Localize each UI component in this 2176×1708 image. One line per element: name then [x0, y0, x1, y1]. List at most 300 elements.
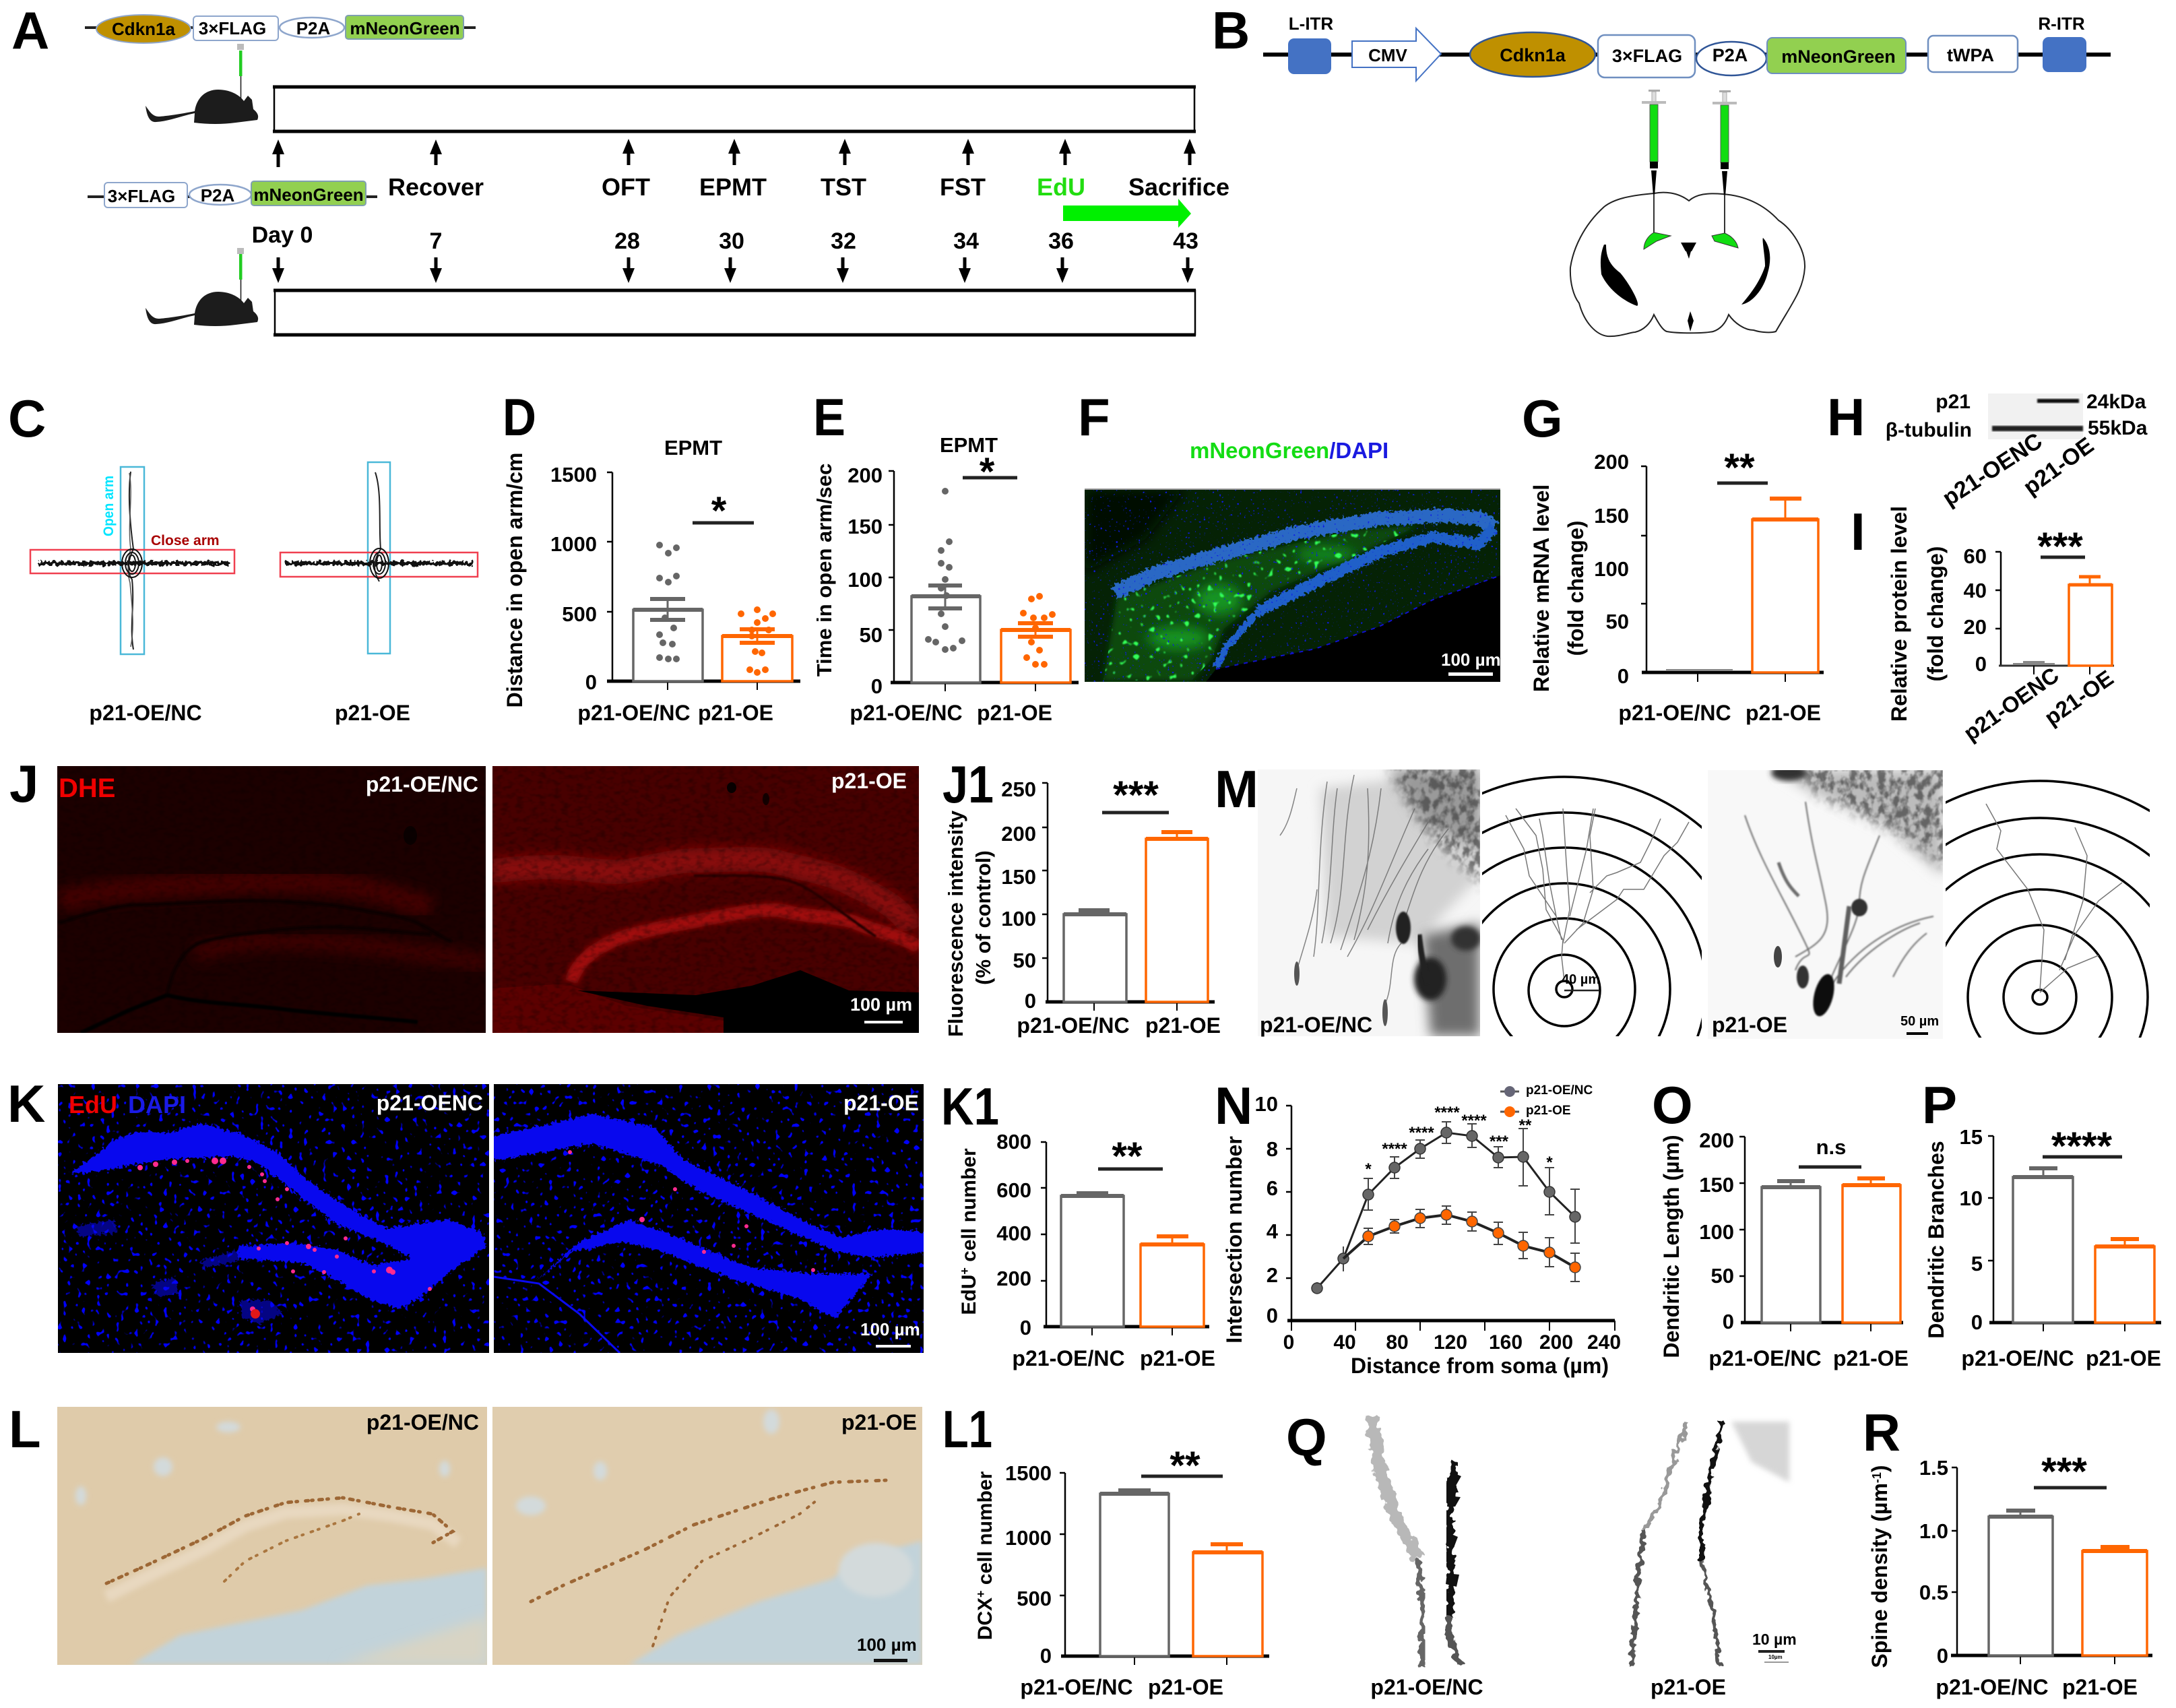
J1 group labels: p21-OE/NC — [1017, 1013, 1130, 1038]
construct map: R-ITR — [2038, 13, 2085, 34]
R group labels: p21-OE/NC — [1935, 1675, 2049, 1699]
N significance stars: ** — [1519, 1116, 1532, 1135]
construct map: mNeonGreen — [1781, 46, 1896, 67]
R y-axis title: ) — [1867, 1465, 1892, 1472]
label B: B — [1212, 1, 1250, 60]
D axes and ticks: 1500 — [550, 463, 597, 486]
E axes and ticks: 150 — [847, 515, 883, 538]
O axes and ticks: 200 — [1699, 1129, 1734, 1152]
panel L1: DCX cell number chart — [942, 1399, 1269, 1699]
E dots — [925, 488, 1056, 668]
label K1: K1 — [941, 1077, 999, 1136]
Q dendrites — [1371, 1416, 1789, 1666]
G axes and ticks: 150 — [1594, 504, 1629, 528]
blot lane labels: p21-OE — [2018, 433, 2099, 500]
panel O: dendritic length chart — [1652, 1075, 1909, 1370]
K1 axes and ticks: 200 — [996, 1267, 1031, 1290]
N significance stars: **** — [1382, 1140, 1407, 1158]
label Q: Q — [1286, 1407, 1327, 1467]
L1 axes and ticks: 0 — [1040, 1644, 1052, 1668]
J image control — [57, 766, 486, 1033]
O bars — [1762, 1178, 1900, 1323]
M Sholl tracing p21-OE — [1946, 780, 2150, 1038]
R significance — [2034, 1450, 2107, 1494]
label H: H — [1827, 387, 1865, 447]
panel J1: fluorescence intensity chart — [942, 755, 1221, 1038]
I y-axis title: (fold change) — [1923, 546, 1948, 681]
O group labels — [1708, 1346, 1909, 1370]
E axes and ticks: 100 — [847, 568, 883, 592]
R axes and ticks: 1.0 — [1919, 1519, 1948, 1543]
P group labels: p21-OE/NC — [1961, 1346, 2074, 1370]
I axes and ticks — [1964, 544, 2114, 676]
Q scale bar: 10 µm — [1752, 1631, 1797, 1648]
G y-axis title — [1529, 484, 1588, 692]
label R: R — [1863, 1403, 1900, 1462]
K labels: p21-OENC — [377, 1091, 483, 1115]
top construct: Cdkn1a 3xFLAG P2A mNeonGreen — [85, 15, 476, 43]
N legend: p21-OE/NC — [1526, 1083, 1593, 1098]
construct map: P2A — [1713, 45, 1748, 65]
L1 significance — [1141, 1444, 1223, 1488]
M scale bar: 50 µm — [1900, 1014, 1939, 1029]
label A: A — [11, 1, 49, 60]
timeline event labels: EPMT — [699, 173, 767, 201]
J1 group labels — [1017, 1013, 1221, 1038]
P group labels — [1961, 1346, 2161, 1370]
panel I: relative protein chart — [1851, 502, 2118, 746]
panel K1: EdU cell number chart — [941, 1077, 1215, 1370]
J1 significance — [1102, 773, 1169, 817]
panel M: neuron images and Sholl tracings — [1218, 769, 2150, 1038]
maze right — [280, 462, 478, 654]
N axes and ticks: 0 — [1267, 1304, 1278, 1327]
K1 bars — [1061, 1193, 1204, 1327]
icon: mouse bottom — [146, 292, 258, 326]
top construct: Cdkn1a 3xFLAG P2A mNeonGreen: 3×FLAG — [199, 18, 266, 38]
down arrows — [272, 257, 1194, 283]
I axes and ticks: 20 — [1964, 615, 1987, 639]
P significance: **** — [2051, 1125, 2113, 1168]
I axes and ticks: 40 — [1964, 579, 1987, 602]
I axes and ticks: 60 — [1964, 544, 1987, 568]
D axes and ticks — [550, 463, 800, 694]
icon: mouse top — [146, 90, 258, 124]
L1 y-axis title: cell number — [974, 1471, 996, 1590]
construct map: L-ITR — [1289, 13, 1333, 34]
top timeline box — [273, 86, 1196, 132]
P axes and ticks: 15 — [1960, 1125, 1983, 1149]
I significance: *** — [2037, 525, 2083, 569]
N axes and ticks — [1255, 1092, 1621, 1354]
L1 group labels: p21-OE — [1148, 1675, 1223, 1699]
D group labels: p21-OE — [698, 701, 773, 725]
G significance — [1717, 446, 1768, 490]
I group labels: p21-OE — [2040, 665, 2118, 730]
D bars — [633, 599, 792, 681]
G axes and ticks: 50 — [1606, 610, 1629, 633]
K labels: DAPI — [128, 1091, 186, 1118]
F image — [1085, 488, 1502, 682]
R y-axis title: Spine density (µm — [1867, 1483, 1892, 1668]
L scale bar: 100 µm — [857, 1635, 917, 1655]
I axes and ticks: 0 — [1975, 652, 1987, 676]
blot labels: 24kDa — [2086, 391, 2146, 413]
label J1: J1 — [942, 755, 994, 814]
M micrograph control label: p21-OE/NC — [1260, 1013, 1372, 1037]
K1 y-axis title: cell number — [958, 1148, 980, 1267]
timeline day labels: 32 — [831, 228, 856, 254]
icon: left syringe — [1642, 90, 1666, 232]
panel H: western blot — [1827, 387, 2148, 511]
L1 axes and ticks: 500 — [1017, 1587, 1052, 1610]
maze captions — [89, 701, 410, 725]
K1 axes and ticks: 400 — [996, 1222, 1031, 1245]
R axes and ticks: 0.5 — [1919, 1581, 1948, 1604]
G axes and ticks: 200 — [1594, 450, 1629, 474]
icon: right syringe — [1713, 90, 1737, 233]
N gray series — [1312, 1122, 1580, 1294]
O group labels: p21-OE — [1833, 1346, 1909, 1370]
icon: syringe top — [237, 44, 244, 103]
timeline event labels: TST — [821, 173, 866, 201]
R group labels — [1935, 1675, 2138, 1699]
Q captions: p21-OE/NC — [1370, 1675, 1483, 1699]
K1 significance — [1098, 1135, 1163, 1178]
panel N: Sholl intersection line chart — [1215, 1076, 1621, 1378]
G group labels — [1618, 701, 1821, 725]
N x-axis title: Distance from soma (µm) — [1351, 1354, 1609, 1378]
timeline day labels — [252, 222, 1198, 254]
I group labels: p21-OENC — [1959, 662, 2063, 746]
N y-axis title: Intersection number — [1222, 1136, 1246, 1343]
N significance stars: **** — [1409, 1124, 1434, 1142]
J labels: DHE — [59, 773, 115, 803]
K1 y-axis title: + — [958, 1267, 971, 1275]
arrow: green EdU period — [1063, 199, 1191, 228]
E significance — [963, 450, 1017, 494]
E axes and ticks: 200 — [847, 464, 883, 487]
G significance: ** — [1724, 446, 1755, 490]
L1 bars — [1100, 1490, 1262, 1656]
G group labels: p21-OE — [1746, 701, 1821, 725]
L labels: p21-OE/NC — [366, 1410, 479, 1434]
Q captions — [1370, 1675, 1726, 1699]
N legend: p21-OE — [1526, 1104, 1571, 1118]
J scale bar: 100 µm — [850, 994, 912, 1015]
N axes and ticks: 10 — [1255, 1092, 1278, 1116]
N orange series — [1343, 1206, 1580, 1282]
D significance: * — [711, 489, 727, 533]
G y-axis title: Relative mRNA level — [1529, 484, 1554, 692]
K1 y-axis title: EdU — [958, 1275, 980, 1315]
R y-axis title: -1 — [1870, 1472, 1884, 1483]
N significance stars: **** — [1461, 1112, 1487, 1130]
panel F: mNeonGreen DAPI micrograph — [1078, 387, 1502, 682]
N axes and ticks: 160 — [1489, 1331, 1523, 1354]
J labels: p21-OE — [831, 769, 907, 793]
E bars — [911, 586, 1070, 683]
panel K: EdU DAPI micrographs — [7, 1074, 930, 1353]
timeline event labels: OFT — [602, 173, 650, 201]
E significance: * — [980, 450, 995, 494]
label L1: L1 — [942, 1399, 992, 1459]
N legend — [1500, 1083, 1593, 1118]
E axes and ticks — [847, 464, 1079, 698]
label N: N — [1215, 1076, 1252, 1135]
N significance stars: *** — [1490, 1133, 1509, 1151]
G y-axis title: (fold change) — [1564, 521, 1588, 656]
label M: M — [1215, 759, 1258, 819]
K1 group labels — [1012, 1346, 1215, 1370]
P axes and ticks: 10 — [1960, 1187, 1983, 1210]
G axes and ticks — [1594, 450, 1824, 688]
maze left — [30, 467, 234, 654]
label O: O — [1652, 1075, 1693, 1135]
N axes and ticks: 6 — [1267, 1176, 1278, 1200]
construct map — [1263, 13, 2111, 81]
L1 axes and ticks — [1005, 1461, 1269, 1668]
N axes and ticks: 240 — [1587, 1331, 1621, 1354]
panel P: dendritic branches chart — [1922, 1075, 2161, 1370]
bottom timeline box — [274, 290, 1196, 335]
J1 axes and ticks: 250 — [1001, 778, 1036, 801]
D group labels — [577, 701, 773, 725]
O axes and ticks: 0 — [1723, 1310, 1734, 1333]
label C: C — [8, 389, 46, 448]
L labels — [366, 1410, 917, 1434]
P y-axis title: Dendritic Branches — [1924, 1141, 1948, 1339]
D axes and ticks: 500 — [562, 602, 597, 626]
maze left: Open arm — [101, 476, 117, 536]
N significance stars — [1365, 1104, 1553, 1178]
timeline event labels: Recover — [388, 173, 484, 201]
D dots — [656, 542, 776, 676]
L1 axes and ticks: 1500 — [1005, 1461, 1052, 1485]
label L: L — [9, 1399, 41, 1459]
L labels: p21-OE — [841, 1410, 917, 1434]
O group labels: p21-OE/NC — [1708, 1346, 1822, 1370]
O y-axis title: Dendritic Length (µm) — [1659, 1135, 1684, 1358]
J1 axes and ticks — [1001, 778, 1215, 1013]
timeline day labels: 30 — [719, 228, 744, 254]
J1 y-axis title — [944, 810, 995, 1037]
Q scale bar: 10µm — [1768, 1654, 1783, 1660]
O axes and ticks: 100 — [1699, 1220, 1734, 1244]
J1 axes and ticks: 200 — [1001, 822, 1036, 846]
J1 y-axis title: (% of control) — [971, 850, 995, 985]
timeline event labels — [388, 173, 1229, 201]
O axes and ticks: 50 — [1711, 1264, 1734, 1288]
E title: EPMT — [940, 433, 998, 457]
R group labels: p21-OE — [2062, 1675, 2138, 1699]
N significance stars: * — [1365, 1160, 1372, 1178]
E group labels: p21-OE/NC — [850, 701, 963, 725]
K1 axes and ticks: 800 — [996, 1130, 1031, 1153]
construct map: Cdkn1a — [1500, 45, 1566, 65]
P axes and ticks: 5 — [1971, 1252, 1983, 1275]
E axes and ticks: 50 — [860, 623, 883, 647]
panel C: maze tracks — [8, 389, 478, 725]
second construct: 3xFLAG P2A mNeonGreen: mNeonGreen — [253, 185, 364, 205]
O axes and ticks: 150 — [1699, 1173, 1734, 1197]
timeline day labels: 36 — [1048, 228, 1074, 254]
L1 axes and ticks: 1000 — [1005, 1526, 1052, 1550]
maze captions: p21-OE — [335, 701, 410, 725]
label F: F — [1078, 387, 1110, 447]
label K: K — [7, 1074, 45, 1133]
timeline event labels: Sacrifice — [1128, 173, 1229, 201]
J1 axes and ticks: 0 — [1025, 989, 1036, 1013]
P group labels: p21-OE — [2086, 1346, 2161, 1370]
K1 axes and ticks: 0 — [1020, 1316, 1031, 1339]
panel B: viral construct and brain injection — [1212, 1, 2111, 336]
O significance — [1799, 1135, 1861, 1167]
maze captions: p21-OE/NC — [89, 701, 202, 725]
blot labels: 55kDa — [2088, 417, 2148, 439]
J1 axes and ticks: 100 — [1001, 907, 1036, 930]
panel A: experimental timeline — [11, 1, 1229, 335]
blot image — [1988, 393, 2083, 439]
construct map: tWPA — [1947, 45, 1994, 65]
O significance: n.s — [1816, 1135, 1846, 1159]
K1 group labels: p21-OE — [1140, 1346, 1215, 1370]
top construct: Cdkn1a 3xFLAG P2A mNeonGreen: P2A — [296, 18, 331, 38]
M Sholl tracing control: 40 µm — [1562, 972, 1600, 987]
D significance — [693, 489, 754, 533]
P bars — [2013, 1168, 2154, 1323]
E y-axis title: Time in open arm/sec — [812, 464, 836, 676]
O axes and ticks — [1699, 1129, 1903, 1333]
panel L: DCX micrographs — [9, 1399, 922, 1665]
R axes and ticks — [1919, 1456, 2152, 1668]
N axes and ticks: 8 — [1267, 1137, 1278, 1161]
timeline day labels: 34 — [953, 228, 979, 254]
K1 significance: ** — [1112, 1135, 1143, 1178]
L image control — [57, 1407, 487, 1665]
N significance stars: **** — [1434, 1104, 1460, 1122]
top construct: Cdkn1a 3xFLAG P2A mNeonGreen: mNeonGreen — [350, 18, 460, 38]
G bars — [1666, 499, 1818, 672]
K1 axes and ticks — [996, 1130, 1209, 1339]
panel G: relative mRNA chart — [1522, 389, 1824, 725]
R axes and ticks: 0 — [1937, 1644, 1948, 1668]
label P: P — [1922, 1075, 1957, 1135]
J scale bar — [850, 994, 912, 1023]
L image p21-OE — [492, 1407, 922, 1665]
K labels: EdU — [69, 1091, 117, 1118]
I y-axis title: Relative protein level — [1887, 506, 1911, 722]
label D: D — [503, 387, 536, 447]
timeline day labels: 28 — [614, 228, 640, 254]
timeline day labels: 7 — [430, 228, 442, 254]
K image p21-OE — [488, 1084, 930, 1353]
N axes and ticks: 80 — [1386, 1331, 1409, 1354]
Q captions: p21-OE — [1651, 1675, 1726, 1699]
R axes and ticks: 1.5 — [1919, 1456, 1948, 1480]
panel Q: dendritic spine images — [1286, 1407, 1797, 1699]
K scale bar: 100 µm — [860, 1319, 920, 1339]
E axes and ticks: 0 — [871, 674, 883, 698]
up arrows — [272, 139, 1196, 167]
second construct: 3xFLAG P2A mNeonGreen: 3×FLAG — [108, 186, 175, 206]
J labels — [59, 769, 907, 803]
N axes and ticks: 40 — [1333, 1331, 1356, 1354]
I y-axis title — [1887, 506, 1948, 722]
D axes and ticks: 0 — [585, 670, 597, 694]
icon: syringe bottom — [237, 248, 244, 307]
second construct: 3xFLAG P2A mNeonGreen: P2A — [201, 185, 235, 205]
maze left: Close arm — [151, 533, 220, 548]
K1 group labels: p21-OE/NC — [1012, 1346, 1125, 1370]
label E: E — [813, 387, 845, 447]
M micrograph control — [1258, 769, 1481, 1036]
L1 y-axis title: DCX — [974, 1598, 996, 1640]
I bars — [2013, 577, 2112, 666]
blot lane labels: p21-OENC — [1938, 428, 2047, 511]
J1 axes and ticks: 50 — [1013, 949, 1036, 972]
label J: J — [9, 754, 38, 813]
N axes and ticks: 4 — [1267, 1220, 1279, 1243]
G group labels: p21-OE/NC — [1618, 701, 1731, 725]
second construct: 3xFLAG P2A mNeonGreen — [88, 181, 377, 208]
M micrograph p21-OE label: p21-OE — [1712, 1013, 1787, 1037]
panel E: time in open arm chart — [812, 387, 1079, 725]
timeline day labels: 43 — [1173, 228, 1198, 254]
D y-axis title: Distance in open arm/cm — [503, 453, 527, 707]
J1 significance: *** — [1113, 773, 1159, 817]
N axes and ticks: 0 — [1283, 1331, 1294, 1354]
blot lane labels — [1938, 428, 2099, 511]
R significance: *** — [2041, 1450, 2087, 1494]
panel D: distance in open arm chart — [503, 387, 800, 725]
blot labels: β-tubulin — [1886, 419, 1972, 441]
F scale bar: 100 µm — [1441, 650, 1501, 670]
G axes and ticks: 0 — [1618, 664, 1629, 688]
N axes and ticks: 200 — [1539, 1331, 1573, 1354]
timeline event labels: FST — [940, 173, 986, 201]
D group labels: p21-OE/NC — [577, 701, 691, 725]
J1 bars — [1064, 832, 1208, 1002]
L1 significance: ** — [1170, 1444, 1201, 1488]
panel J: DHE micrographs — [9, 754, 919, 1033]
P axes and ticks: 0 — [1971, 1310, 1983, 1334]
timeline day labels: Day 0 — [252, 222, 313, 248]
L1 group labels — [1020, 1675, 1223, 1699]
M micrograph p21-OE — [1743, 770, 1943, 1018]
K labels — [69, 1091, 919, 1118]
G axes and ticks: 100 — [1594, 557, 1629, 581]
P axes and ticks — [1960, 1125, 2161, 1334]
J image p21-OE — [492, 766, 919, 1033]
top construct: Cdkn1a 3xFLAG P2A mNeonGreen: Cdkn1a — [112, 19, 175, 39]
L1 group labels: p21-OE/NC — [1020, 1675, 1133, 1699]
J1 group labels: p21-OE — [1145, 1013, 1221, 1038]
K image control — [58, 1084, 489, 1353]
F title: mNeonGreen/DAPI — [1190, 438, 1388, 463]
L1 y-axis title: + — [974, 1590, 988, 1598]
R bars — [1989, 1511, 2147, 1655]
K1 axes and ticks: 600 — [996, 1178, 1031, 1202]
N significance stars: * — [1546, 1153, 1553, 1172]
blot labels — [1886, 391, 2148, 441]
N axes and ticks: 2 — [1267, 1263, 1278, 1287]
E group labels — [850, 701, 1052, 725]
panel R: spine density chart — [1863, 1403, 2152, 1699]
construct map: 3×FLAG — [1612, 46, 1682, 66]
label G: G — [1522, 389, 1563, 448]
K labels: p21-OE — [843, 1091, 919, 1115]
